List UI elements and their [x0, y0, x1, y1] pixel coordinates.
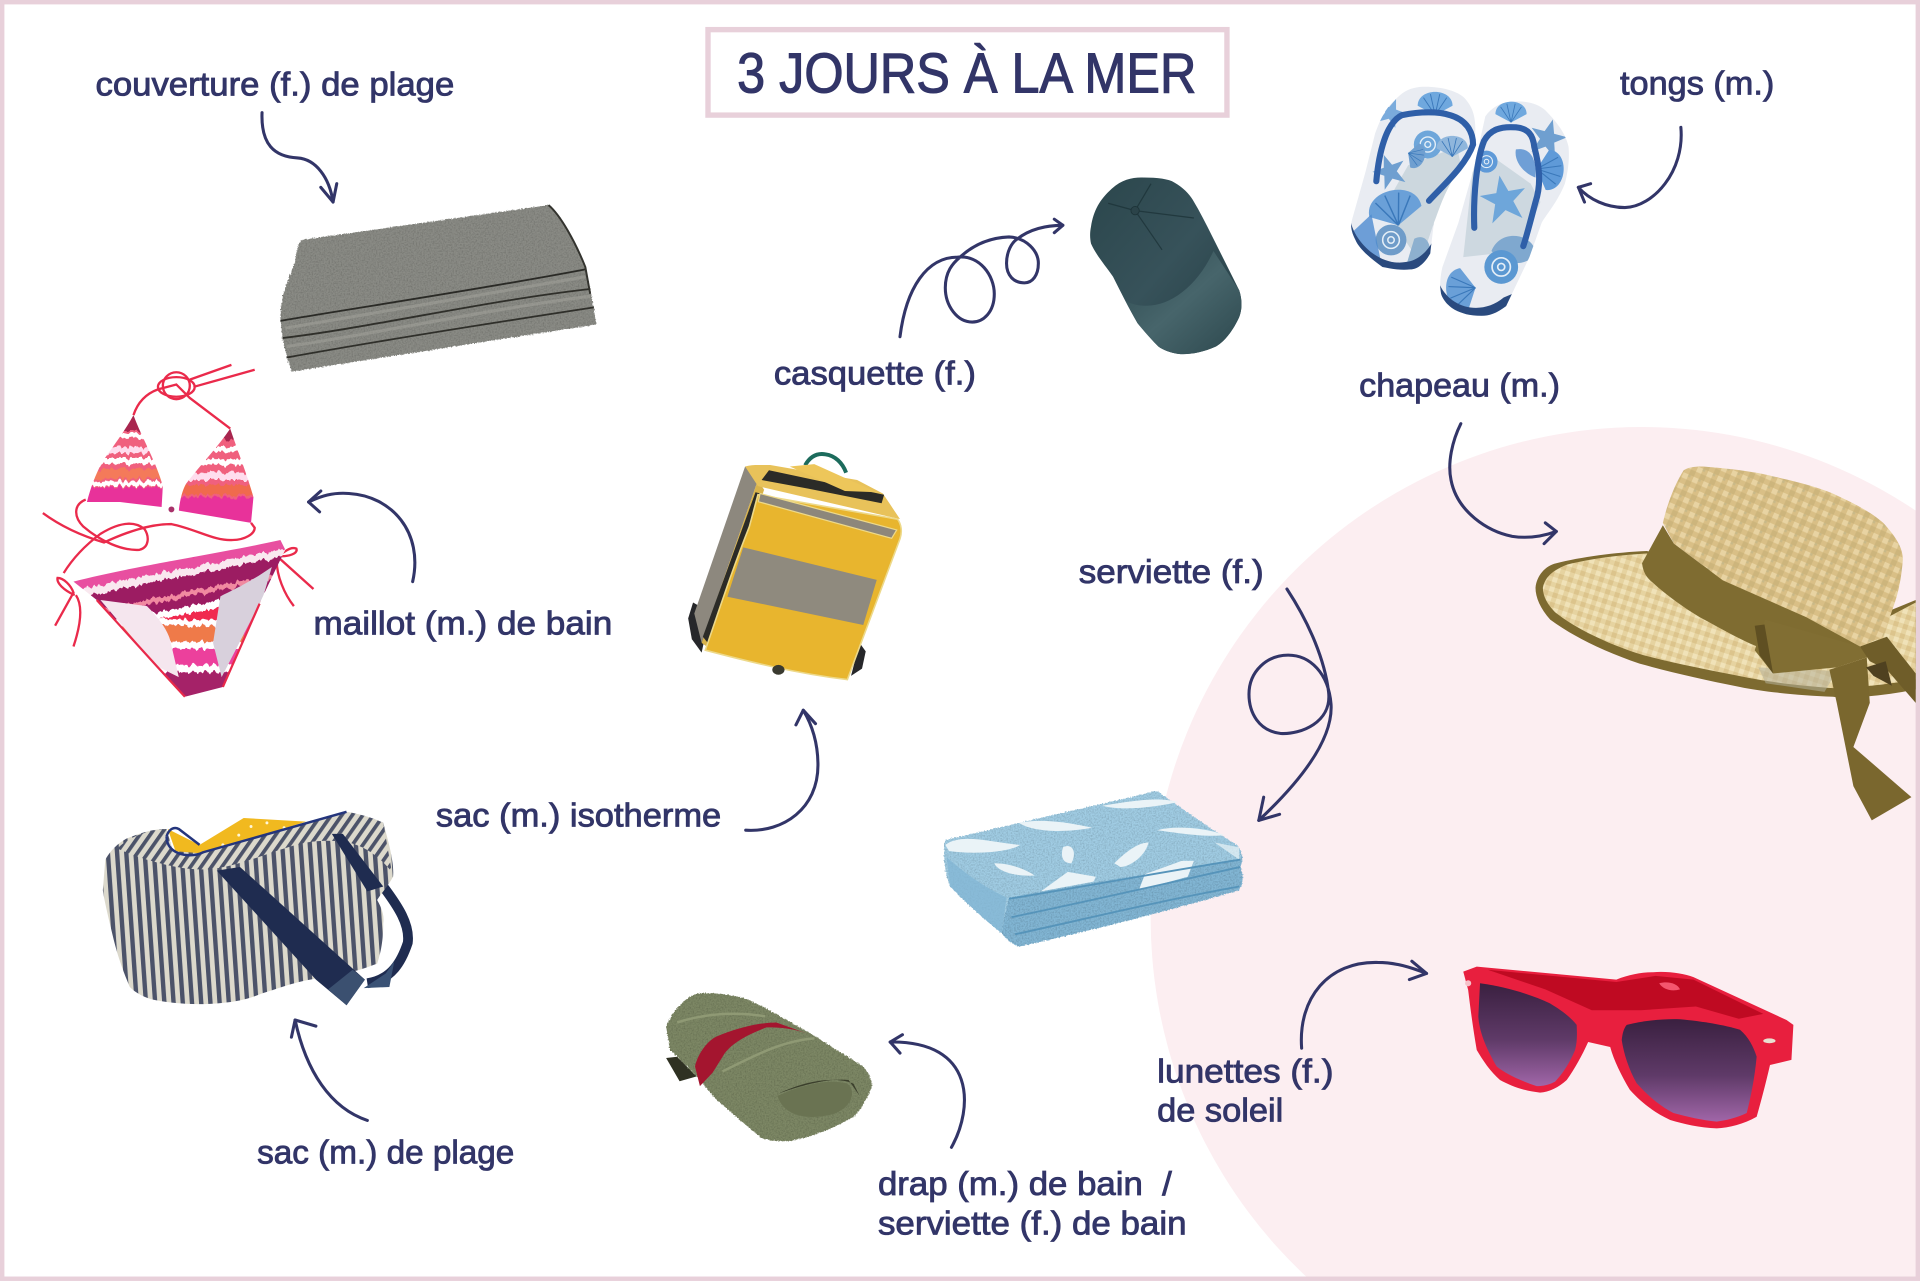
icon: grey beach blanket — [280, 205, 596, 372]
title — [708, 30, 1227, 115]
label: couverture de plage: couverture (f.) de plage — [96, 67, 454, 104]
label: tongs: tongs (m.) — [1620, 65, 1774, 102]
icon: rolled green towel — [666, 993, 872, 1141]
pink background circle — [1151, 427, 1920, 1281]
label: lunettes de soleil — [1157, 1053, 1333, 1130]
label: maillot de bain: maillot (m.) de bain — [313, 605, 612, 642]
label: sac isotherme: sac (m.) isotherme — [436, 798, 721, 835]
arrow: maillot — [309, 491, 415, 582]
arrow: casquette — [900, 219, 1063, 337]
icon: insulated yellow bag — [688, 454, 901, 680]
arrow: sac isotherme — [746, 710, 818, 830]
arrow: drap de bain — [890, 1035, 964, 1147]
label: drap de bain: drap (m.) de bain / — [878, 1166, 1172, 1203]
icon: flip-flops — [1347, 80, 1573, 324]
icon: striped beach bag — [103, 812, 408, 1005]
arrow: serviette — [1249, 589, 1331, 820]
title: 3 JOURS À LA MER — [737, 41, 1196, 104]
label: drap de bain: serviette (f.) de bain — [878, 1205, 1187, 1242]
arrow: tongs — [1578, 127, 1681, 208]
icon: bikini — [42, 364, 314, 698]
label: casquette: casquette (f.) — [774, 355, 976, 392]
icon: red sunglasses — [1463, 967, 1793, 1128]
arrow: sac de plage — [291, 1020, 367, 1120]
icon: cap — [1090, 178, 1242, 354]
label: sac de plage: sac (m.) de plage — [257, 1134, 514, 1171]
arrow: chapeau — [1450, 424, 1556, 544]
label: drap de bain — [878, 1166, 1187, 1242]
label: lunettes de soleil: lunettes (f.) — [1157, 1053, 1333, 1090]
icon: straw hat — [1536, 467, 1916, 820]
icon: blue folded towel — [944, 791, 1243, 947]
label: chapeau: chapeau (m.) — [1359, 368, 1560, 405]
label: lunettes de soleil: de soleil — [1157, 1093, 1283, 1130]
arrow: couverture — [262, 113, 337, 202]
arrow: lunettes — [1301, 961, 1427, 1048]
label: serviette: serviette (f.) — [1079, 554, 1264, 591]
